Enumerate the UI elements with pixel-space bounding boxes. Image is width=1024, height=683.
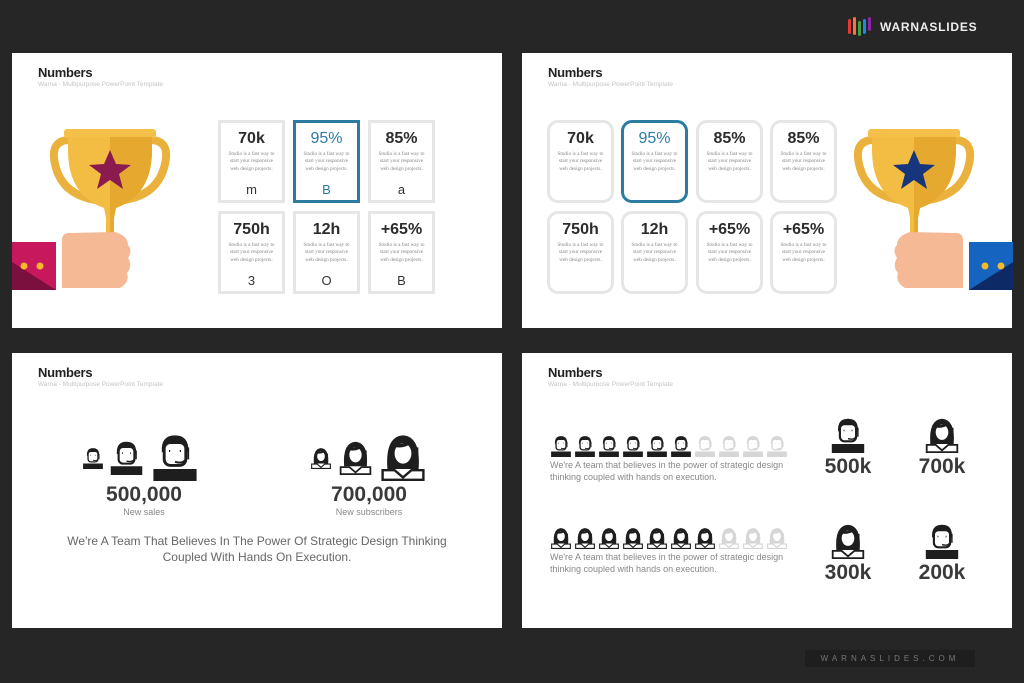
footer url: WARNASLIDES.COM [821, 654, 959, 663]
stat 500k: 500k [825, 455, 871, 478]
stat 200k: 200k [919, 561, 965, 584]
stat box 12h [621, 211, 688, 294]
slide: trophy grid left [12, 53, 502, 328]
stat 500k [825, 418, 872, 478]
stat box 750h: 750h [233, 221, 270, 238]
stat box +65% b: +65% [783, 221, 824, 238]
stat box +65%: web design projects. [380, 257, 423, 263]
stat box 85%: a [398, 182, 405, 197]
stat box 750h: 750h [562, 221, 599, 238]
stat box 95%: 95% [310, 130, 343, 147]
stat box 70k: Studio is a fast way to [558, 151, 603, 157]
stat box 85%: web design projects. [708, 166, 751, 172]
title: Numbers [548, 65, 602, 80]
stat box +65%: B [397, 273, 406, 288]
stat box 750h [547, 211, 614, 294]
stat box 85%: web design projects. [380, 166, 423, 172]
stat box +65% b: Studio is a fast way to [781, 242, 826, 248]
stat box 95%: web design projects. [633, 166, 676, 172]
stat box 750h: start your responsive [559, 249, 602, 255]
stat box +65% [696, 211, 763, 294]
stat box +65%: start your responsive [380, 249, 423, 255]
stat 700k [919, 418, 966, 478]
stat box +65% b: start your responsive [782, 249, 825, 255]
stat box 85% b: 85% [787, 130, 820, 147]
stat box 70k: 70k [238, 130, 265, 147]
title: Numbers [548, 365, 602, 380]
stat 500,000: 500,000 [106, 483, 182, 506]
stat box 12h: Studio is a fast way to [304, 242, 349, 248]
footer url [805, 650, 975, 667]
stat box 750h: Studio is a fast way to [229, 242, 274, 248]
stat box +65%: web design projects. [708, 257, 751, 263]
stat box 70k: web design projects. [230, 166, 273, 172]
stat box 12h: start your responsive [305, 249, 348, 255]
pictogram row: women 7 of 10 [551, 528, 787, 549]
label new subscribers: New subscribers [336, 507, 402, 517]
stat box 70k: Studio is a fast way to [229, 151, 274, 157]
stat box 85% b: web design projects. [782, 166, 825, 172]
stat box 85% b [770, 120, 837, 203]
icons: women growing [311, 435, 425, 481]
slide: people totals [12, 353, 502, 628]
stat box 95%: start your responsive [633, 158, 676, 164]
stat box 85%: start your responsive [380, 158, 423, 164]
stat box 70k: m [246, 182, 257, 197]
stat box +65%: +65% [381, 221, 422, 238]
stat box 95% [293, 120, 360, 203]
stat box +65%: start your responsive [708, 249, 751, 255]
text row 1: We're A team that believes in the power of strategic design [550, 460, 783, 470]
slide: people pictograms [522, 353, 1012, 628]
text row 1: thinking coupled with hands on execution. [550, 472, 717, 482]
stat box 85% b: start your responsive [782, 158, 825, 164]
title: Numbers [38, 65, 92, 80]
stat box 750h: 3 [248, 273, 255, 288]
stat box +65%: +65% [709, 221, 750, 238]
logo [848, 17, 977, 36]
paragraph: We're A Team That Believes In The Power Of Strategic Design Thinking [67, 534, 447, 548]
stat box 70k: start your responsive [230, 158, 273, 164]
stat box +65% b: web design projects. [782, 257, 825, 263]
text row 1 [550, 460, 783, 482]
subtitle: Warna - Multipurpose PowerPoint Template [38, 381, 163, 388]
icons: men growing [83, 435, 197, 481]
stat box 70k: web design projects. [559, 166, 602, 172]
stat box 85%: Studio is a fast way to [707, 151, 752, 157]
stat box 95%: B [322, 182, 331, 197]
stat box 85% b: Studio is a fast way to [781, 151, 826, 157]
stat box 95% [621, 120, 688, 203]
pictogram row: men 6 of 10 [551, 436, 787, 457]
subtitle: Warna - Multipurpose PowerPoint Template [548, 81, 673, 88]
paragraph: Coupled With Hands On Execution. [163, 550, 351, 564]
stat 700,000: 700,000 [331, 483, 407, 506]
subtitle: Warna - Multipurpose PowerPoint Template [548, 381, 673, 388]
stat box 12h: start your responsive [633, 249, 676, 255]
stat 700k: 700k [919, 455, 965, 478]
stat box 70k [218, 120, 285, 203]
stat box 95%: Studio is a fast way to [304, 151, 349, 157]
stat box 85%: 85% [385, 130, 418, 147]
stat box 750h: Studio is a fast way to [558, 242, 603, 248]
stat box 95%: web design projects. [305, 166, 348, 172]
stat 300k: 300k [825, 561, 871, 584]
stat box 12h: Studio is a fast way to [632, 242, 677, 248]
stat box 12h: web design projects. [633, 257, 676, 263]
stat box 95%: Studio is a fast way to [632, 151, 677, 157]
icon: trophy magenta [12, 129, 166, 290]
stat box 85% [368, 120, 435, 203]
stat 300k [825, 524, 872, 584]
stat box 12h [293, 211, 360, 294]
stat 200k [919, 524, 966, 584]
icon: trophy blue [858, 129, 1013, 290]
stat box 70k [547, 120, 614, 203]
stat box 12h: O [321, 273, 332, 288]
stat box 750h: web design projects. [559, 257, 602, 263]
stat box +65% [368, 211, 435, 294]
title: Numbers [38, 365, 92, 380]
label new sales: New sales [123, 507, 165, 517]
text row 2: We're A team that believes in the power of strategic design [550, 552, 783, 562]
text row 2 [550, 552, 783, 574]
stat box 750h: web design projects. [230, 257, 273, 263]
stat box 750h: start your responsive [230, 249, 273, 255]
subtitle: Warna - Multipurpose PowerPoint Template [38, 81, 163, 88]
stat box 750h [218, 211, 285, 294]
stat box 70k: start your responsive [559, 158, 602, 164]
stat box 12h: web design projects. [305, 257, 348, 263]
stat box 95%: start your responsive [305, 158, 348, 164]
stat box 85%: 85% [713, 130, 746, 147]
stat box 70k: 70k [567, 130, 594, 147]
stat box +65%: Studio is a fast way to [707, 242, 752, 248]
stat box 85% [696, 120, 763, 203]
paragraph [67, 534, 447, 564]
stat box 85%: start your responsive [708, 158, 751, 164]
text row 2: thinking coupled with hands on execution. [550, 564, 717, 574]
stat box 85%: Studio is a fast way to [379, 151, 424, 157]
stat box 12h: 12h [641, 221, 668, 238]
stat box +65% b [770, 211, 837, 294]
stat box 95%: 95% [638, 130, 671, 147]
slide: trophy grid right [522, 53, 1012, 328]
stat box 12h: 12h [313, 221, 340, 238]
stat box +65%: Studio is a fast way to [379, 242, 424, 248]
logo: WARNASLIDES [880, 20, 977, 34]
